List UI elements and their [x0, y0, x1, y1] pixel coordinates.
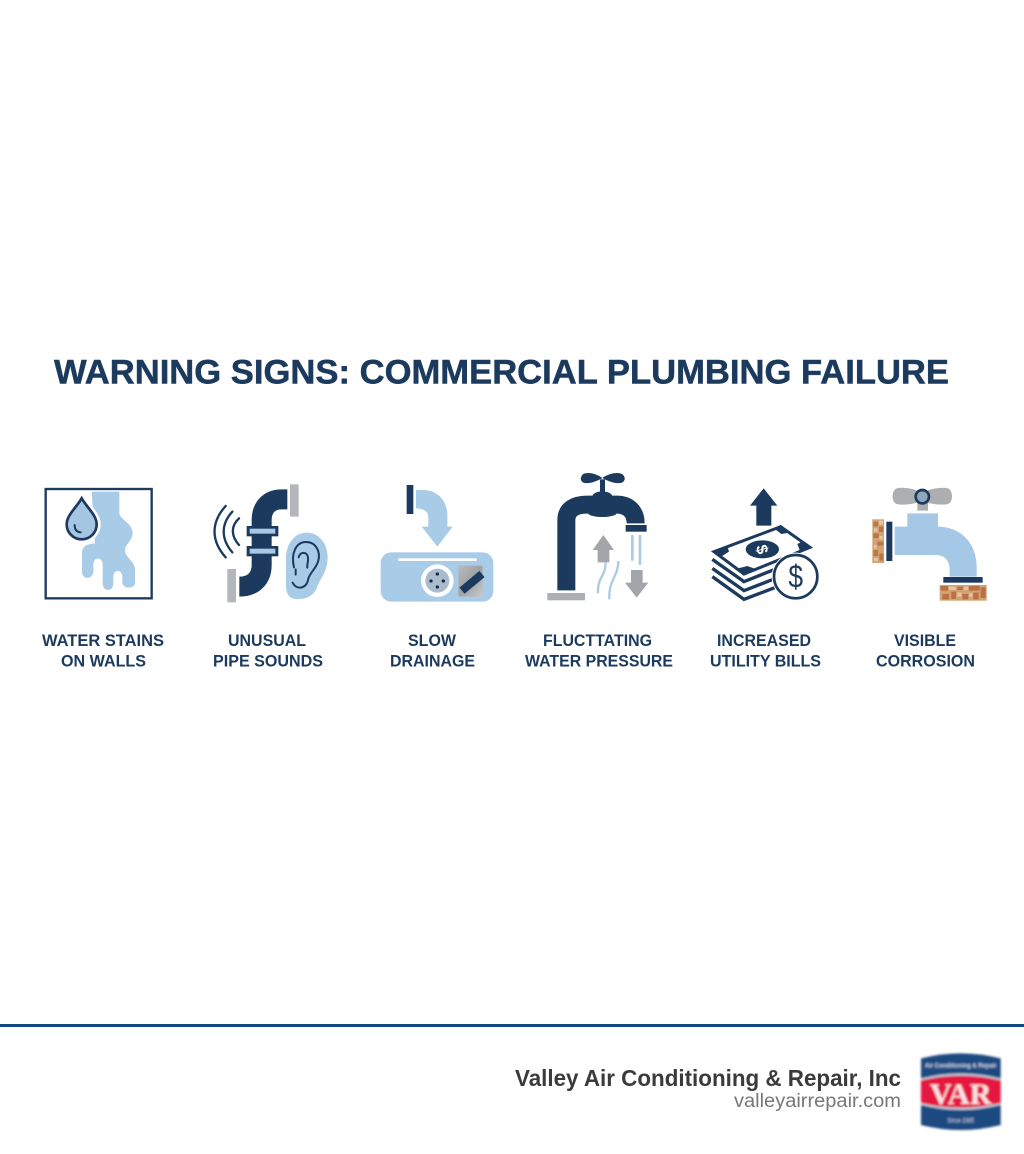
- panel: unusual pipe sounds: [213, 484, 328, 670]
- corrosion patch: floor: [940, 585, 987, 601]
- panel: fluctuating water pressure: [525, 473, 673, 670]
- label: water stains on walls: [42, 631, 164, 670]
- logo: Since 1985: [947, 1117, 974, 1124]
- icon: stack of money with up arrow: [712, 488, 820, 601]
- label: visible corrosion: [876, 631, 975, 670]
- label: visible corrosion: CORROSION: [876, 652, 975, 670]
- company name: Valley Air Conditioning & Repair, Inc: [515, 1065, 901, 1091]
- panel: visible corrosion: [872, 488, 987, 670]
- logo: Air Conditioning & Repair: [925, 1062, 997, 1069]
- corrosion patch: wall: [872, 519, 884, 563]
- label: visible corrosion: VISIBLE: [894, 631, 956, 650]
- label: slow drainage: SLOW: [408, 631, 457, 650]
- label: fluctuating water pressure: WATER PRESSURE: [525, 652, 673, 670]
- icon: drain with downward arrow: [381, 485, 493, 602]
- label: water stains on walls: ON WALLS: [61, 652, 146, 670]
- icon: pipe with sound waves and ear: [215, 484, 328, 602]
- website: valleyairrepair.com: [734, 1091, 901, 1112]
- icon: stack of money with up arrow: $: [788, 558, 803, 594]
- label: fluctuating water pressure: FLUCTTATING: [543, 631, 652, 650]
- panel: increased utility bills: [710, 488, 821, 670]
- panel: slow drainage: [381, 485, 493, 670]
- title: WARNING SIGNS: COMMERCIAL PLUMBING FAILURE: [54, 354, 949, 392]
- label: water stains on walls: WATER STAINS: [42, 631, 164, 650]
- label: slow drainage: [390, 631, 475, 670]
- label: increased utility bills: INCREASED: [717, 631, 811, 650]
- label: increased utility bills: UTILITY BILLS: [710, 652, 821, 670]
- label: unusual pipe sounds: [213, 631, 323, 670]
- footer: [0, 1024, 1024, 1130]
- label: increased utility bills: [710, 631, 821, 670]
- logo: [921, 1053, 1001, 1130]
- icon: stack of money with up arrow: $: [752, 543, 771, 556]
- icon: corroded tap: [872, 488, 987, 601]
- icon: water stain on wall: [46, 489, 152, 598]
- logo: VAR: [930, 1079, 992, 1111]
- icon: faucet with pressure arrows: [547, 473, 648, 600]
- label: fluctuating water pressure: [525, 631, 673, 670]
- label: unusual pipe sounds: PIPE SOUNDS: [213, 652, 323, 670]
- label: slow drainage: DRAINAGE: [390, 652, 475, 670]
- panel: water stains on walls: [42, 489, 164, 670]
- label: unusual pipe sounds: UNUSUAL: [228, 631, 306, 650]
